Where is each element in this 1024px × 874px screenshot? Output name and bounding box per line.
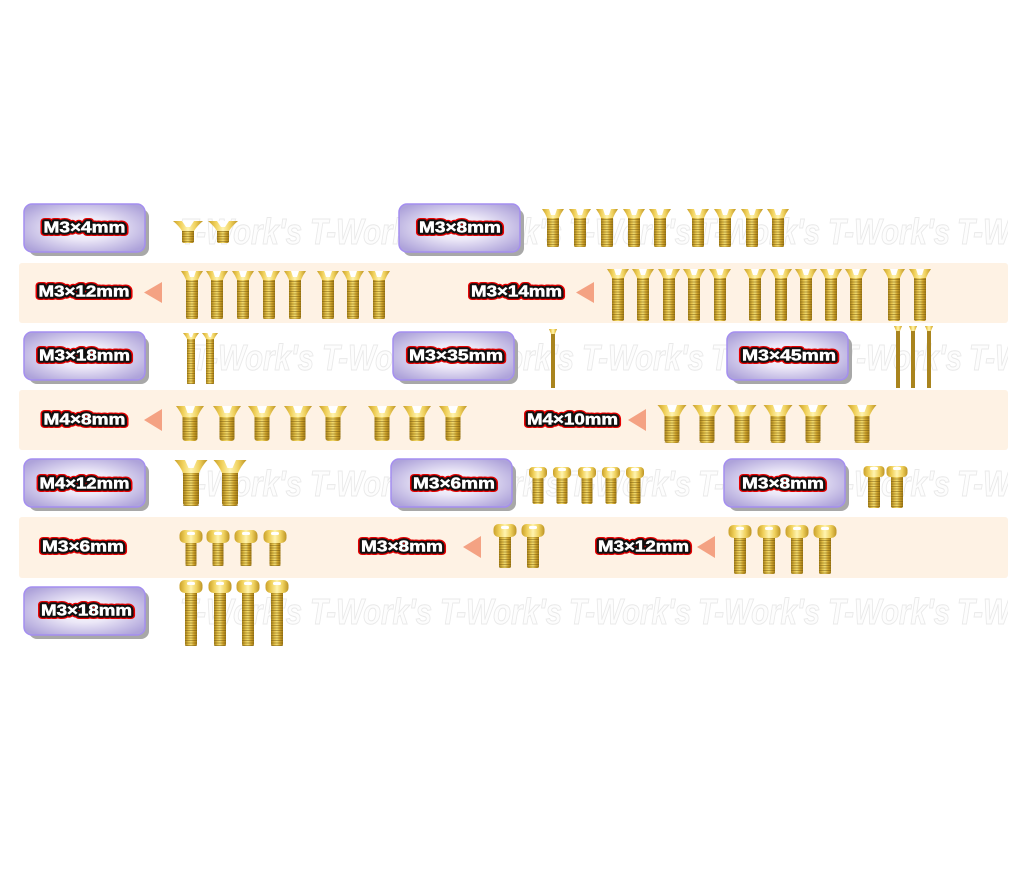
label: M3x12mm: M3×12mm (38, 284, 130, 300)
screws: M3x4 countersunk (173, 221, 238, 243)
badge backgrounds (24, 204, 852, 639)
label: M3x4mm: M3×4mm (44, 220, 126, 236)
label: M3x45mm: M3×45mm (742, 348, 836, 364)
watermark: T-Work's pattern (180, 211, 1024, 632)
screws: M3x8 cap head (494, 524, 544, 568)
panel: row band 2 (19, 263, 1008, 323)
label: M3x18mm cap: M3×18mm (41, 602, 132, 620)
watermark: T-Work's pattern: T-Work's (192, 337, 314, 378)
label: M4x8mm: M4×8mm (44, 412, 126, 428)
label: M3x6mm button: M3×6mm (413, 476, 495, 492)
label: M3x35mm: M3×35mm (409, 348, 503, 364)
label: M3x8mm button: M3×8mm (742, 476, 824, 492)
screws: M3x18 countersunk (183, 333, 218, 384)
label: M4x8mm: M4×8mm (44, 412, 126, 428)
label: M3x18mm: M3×18mm (39, 348, 130, 364)
watermark: T-Work's pattern: T-Work's (569, 463, 691, 504)
label: M3x12mm: M3×12mm (38, 284, 130, 300)
label: M3x14mm: M3×14mm (471, 284, 562, 300)
label: M3x45mm: M3×45mm (742, 348, 836, 364)
label: M3x6mm cap: M3×6mm (42, 538, 124, 556)
watermark: T-Work's pattern: T-Work's (452, 337, 574, 378)
label: M3x18mm: M3×18mm (39, 348, 130, 364)
screws: M3x45 countersunk (894, 326, 933, 388)
label: M3x14mm: M3×14mm (471, 284, 562, 300)
label: M3x4mm: M3×4mm (44, 220, 126, 236)
watermark: T-Work's pattern: T-Work's (828, 591, 950, 632)
screws: M3x6 button head (529, 467, 644, 504)
panel: row band 4 (19, 390, 1008, 450)
watermark: T-Work's pattern: T-Work's (310, 591, 432, 632)
label: M3x35mm: M3×35mm (409, 348, 503, 364)
watermark: T-Work's pattern: T-Work's (440, 463, 562, 504)
watermark: T-Work's pattern: T-Work's (711, 337, 833, 378)
label: M3x6mm button: M3×6mm (413, 476, 495, 492)
label: M3x8mm button: M3×8mm (742, 476, 824, 492)
watermark: T-Work's pattern: T-Work's (569, 591, 691, 632)
label: M3x4mm: M3×4mm (44, 220, 126, 236)
watermark: T-Work's pattern: T-Work's (180, 463, 302, 504)
screws: M3x6 cap head (180, 530, 286, 566)
screws: M4x12 countersunk (174, 460, 246, 506)
screws: M4x10 countersunk (658, 405, 876, 443)
label: M3x45mm: M3×45mm (742, 348, 836, 364)
watermark: T-Work's pattern: T-Work's (322, 337, 444, 378)
screws: M3x12 countersunk (181, 271, 390, 319)
watermark: T-Work's pattern: T-Work's (698, 211, 820, 252)
screws: M4x8 countersunk (176, 406, 467, 441)
label: M3x12mm cap: M3×12mm (598, 538, 689, 556)
label: M3x18mm cap: M3×18mm (41, 602, 132, 620)
label: M4x10mm: M4×10mm (527, 412, 618, 428)
arrows pointing to labels (144, 282, 715, 558)
screws: M3x18 cap head (180, 580, 288, 646)
watermark: T-Work's pattern: T-Work's (310, 211, 432, 252)
label: M3x8mm cap: M3×8mm (361, 538, 443, 556)
label: M4x12mm: M4×12mm (40, 476, 130, 492)
label: M4x12mm: M4×12mm (40, 476, 130, 492)
watermark: T-Work's pattern: T-Work's (828, 463, 950, 504)
label: M4x8mm: M4×8mm (44, 412, 126, 428)
label: M3x6mm button: M3×6mm (413, 476, 495, 492)
screws: M3x12 cap head (728, 525, 836, 574)
watermark: T-Work's pattern: T-Work's (180, 211, 302, 252)
watermark: T-Work's pattern: T-Work's (440, 211, 562, 252)
watermark: T-Work's pattern: T-Work's (840, 337, 962, 378)
label: M3x6mm cap: M3×6mm (42, 538, 124, 556)
label: M4x10mm: M4×10mm (527, 412, 618, 428)
label: M3x18mm: M3×18mm (39, 348, 130, 364)
label: M3x8mm: M3×8mm (419, 220, 501, 236)
watermark: T-Work's pattern: T-Work's (310, 463, 432, 504)
label: M4x12mm: M4×12mm (40, 476, 130, 492)
label: M3x6mm cap: M3×6mm (42, 538, 124, 556)
label: M3x8mm cap: M3×8mm (361, 538, 443, 556)
watermark: T-Work's pattern: T-Work's (582, 337, 704, 378)
screws: M3x8 countersunk (542, 209, 789, 247)
watermark: T-Work's pattern: T-Work's (698, 591, 820, 632)
watermark: T-Work's pattern: T-Work's (440, 591, 562, 632)
screws: M3x14 countersunk (607, 269, 931, 321)
watermark: T-Work's pattern: T-Work's (569, 211, 691, 252)
label: M3x14mm: M3×14mm (471, 284, 562, 300)
screws: M3x8 button head (864, 466, 908, 508)
watermark: T-Work's pattern: T-Work's (828, 211, 950, 252)
label: M3x12mm cap: M3×12mm (598, 538, 689, 556)
screw: M3x35 countersunk (549, 329, 557, 388)
label: M3x12mm: M3×12mm (38, 284, 130, 300)
label: M3x8mm cap: M3×8mm (361, 538, 443, 556)
label: M3x12mm cap: M3×12mm (598, 538, 689, 556)
panel: row band 6 (19, 517, 1008, 578)
watermark: T-Work's pattern: T-Work's (180, 591, 302, 632)
label: M3x35mm: M3×35mm (409, 348, 503, 364)
label: M3x8mm: M3×8mm (419, 220, 501, 236)
label: M4x10mm: M4×10mm (527, 412, 618, 428)
label: M3x8mm button: M3×8mm (742, 476, 824, 492)
label: M3x8mm: M3×8mm (419, 220, 501, 236)
watermark: T-Work's pattern: T-Work's (698, 463, 820, 504)
label: M3x18mm cap: M3×18mm (41, 602, 132, 620)
